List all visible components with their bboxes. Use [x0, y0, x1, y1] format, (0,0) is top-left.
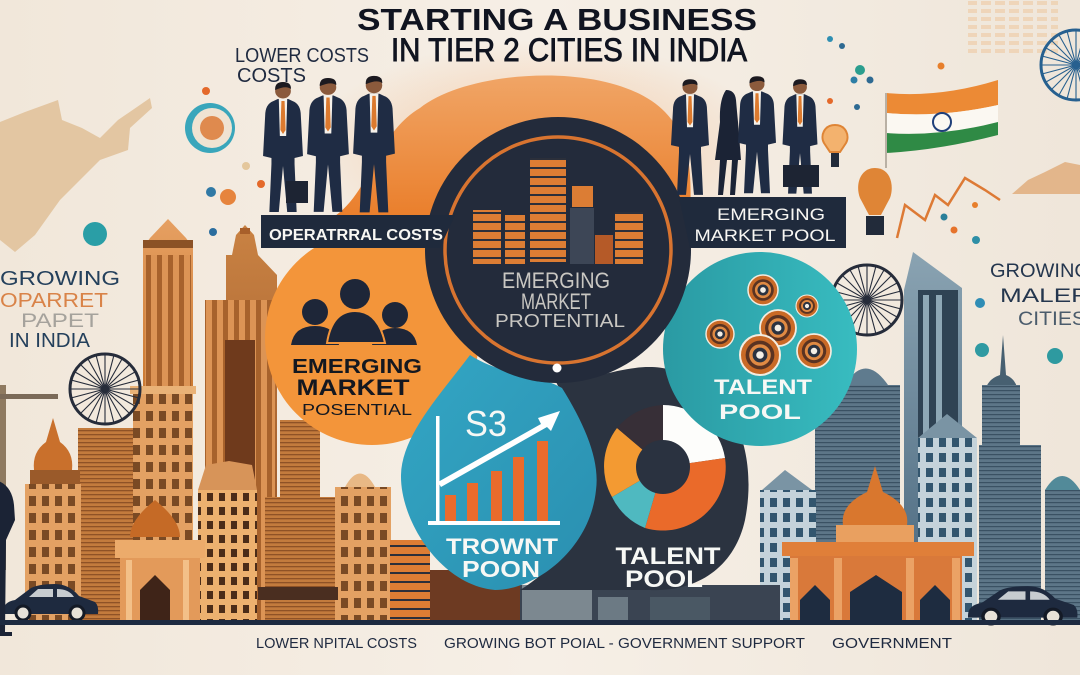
side note: growing market right: CITIES	[1018, 309, 1080, 330]
ashoka wheel mid right	[832, 265, 902, 335]
dark ochre blocks	[265, 420, 520, 620]
panel: central dark circle	[425, 117, 691, 383]
panel: teal talent circle	[663, 252, 857, 446]
blue tower behind talent circle	[815, 368, 900, 620]
ashoka wheel left	[70, 354, 140, 424]
low building right	[760, 470, 816, 620]
ashoka wheel top right	[1041, 30, 1080, 100]
heading: talent pool: POOL	[719, 401, 801, 424]
bottom caption strip: GROWING BOT POIAL - GOVERNMENT SUPPORT	[444, 636, 805, 652]
businesspeople group right	[671, 76, 819, 195]
side note: growing market right	[990, 261, 1080, 330]
map of India silhouette	[0, 98, 152, 252]
heading: emerging market potential: MARKET	[296, 375, 410, 400]
spire tower	[979, 335, 1041, 620]
panel: emerging market pool bar	[679, 197, 846, 248]
panel: emerging market pool bar: EMERGING	[717, 205, 825, 224]
title	[357, 2, 757, 68]
tower: back right	[205, 225, 277, 620]
title: IN TIER 2 CITIES IN INDIA	[391, 32, 748, 68]
panel: operational costs bar: OPERATRRAL COSTS	[269, 227, 443, 244]
orange pavilion	[115, 500, 205, 620]
pie chart	[604, 405, 726, 531]
heading: emerging market protential: MARKET	[521, 289, 591, 314]
right skyline	[760, 30, 1080, 624]
ochre block with windows	[198, 461, 257, 620]
bottom centre low buildings	[520, 585, 780, 620]
panel: emerging market pool bar: MARKET POOL	[694, 226, 836, 245]
heading: emerging market potential: POSENTIAL	[302, 402, 412, 419]
heading: talent pool	[714, 376, 812, 424]
bottom caption strip: LOWER NPITAL COSTS	[256, 636, 417, 652]
icon: three people	[291, 279, 417, 345]
zigzag trend line	[897, 178, 1000, 238]
icon: central skyline	[473, 158, 643, 264]
side note: growing market left: IN INDIA	[9, 330, 91, 352]
heading: talent pool lower: TALENT	[616, 543, 721, 570]
mid white-blue building	[918, 414, 977, 620]
top-left circular badge	[185, 103, 235, 153]
striped block	[78, 428, 133, 620]
man at left edge	[0, 480, 15, 636]
crane	[0, 385, 58, 570]
side note: lower costs	[235, 45, 369, 87]
lightbulb large	[858, 168, 892, 235]
indian flag	[885, 80, 998, 168]
orange palace	[782, 466, 974, 620]
side note: lower costs: LOWER COSTS	[235, 45, 369, 67]
heading: emerging market protential: PROTENTIAL	[495, 311, 625, 331]
panel: operational costs bar	[261, 215, 455, 248]
domed tower	[25, 418, 81, 620]
heading: talent pool: TALENT	[714, 376, 812, 399]
panel: orange emerging market circle	[265, 231, 479, 445]
side note: growing market left	[0, 268, 120, 352]
businessmen group left	[263, 76, 395, 212]
bar chart with arrow	[428, 411, 560, 525]
orange dome backdrop	[335, 75, 691, 216]
bottom caption strip	[256, 636, 952, 652]
left skyline	[0, 219, 520, 636]
car left	[3, 584, 98, 620]
base line	[0, 620, 1080, 625]
lightbulb small	[822, 125, 848, 167]
icon: coins	[706, 275, 831, 375]
heading: talent pool lower: POOL	[625, 566, 703, 593]
heading: trownt poon: TROWNT	[446, 534, 559, 559]
label: S3: S3	[465, 403, 507, 444]
panel: dark pie blob	[520, 367, 749, 593]
peach glow behind dome	[310, 40, 770, 260]
heading: emerging market protential	[495, 268, 625, 331]
heading: talent pool lower	[616, 543, 721, 593]
faint dotted pattern top right	[968, 0, 1058, 56]
side note: lower costs: COSTS	[237, 65, 306, 87]
car right	[968, 586, 1077, 624]
bottom caption strip: GOVERNMENT	[832, 636, 952, 652]
title: STARTING A BUSINESS	[357, 2, 757, 37]
heading: emerging market potential	[292, 356, 422, 419]
side note: growing market right: MALER	[1000, 286, 1080, 307]
right edge building	[1045, 476, 1080, 620]
tall glass tower	[904, 252, 962, 620]
heading: trownt poon: POON	[462, 556, 540, 582]
cloud	[1012, 162, 1080, 194]
heading: emerging market protential: EMERGING	[502, 268, 610, 293]
side note: growing market left: PAPET	[21, 311, 100, 332]
side note: growing market left: OPARRET	[0, 290, 108, 312]
scattered dots and confetti	[83, 36, 1063, 364]
heading: emerging market potential: EMERGING	[292, 356, 422, 378]
tower: tall orange	[130, 219, 196, 620]
heading: trownt poon	[446, 534, 559, 582]
panel: blue growth teardrop	[401, 355, 597, 590]
signboard	[258, 587, 338, 600]
side note: growing market left: GROWING	[0, 268, 120, 290]
